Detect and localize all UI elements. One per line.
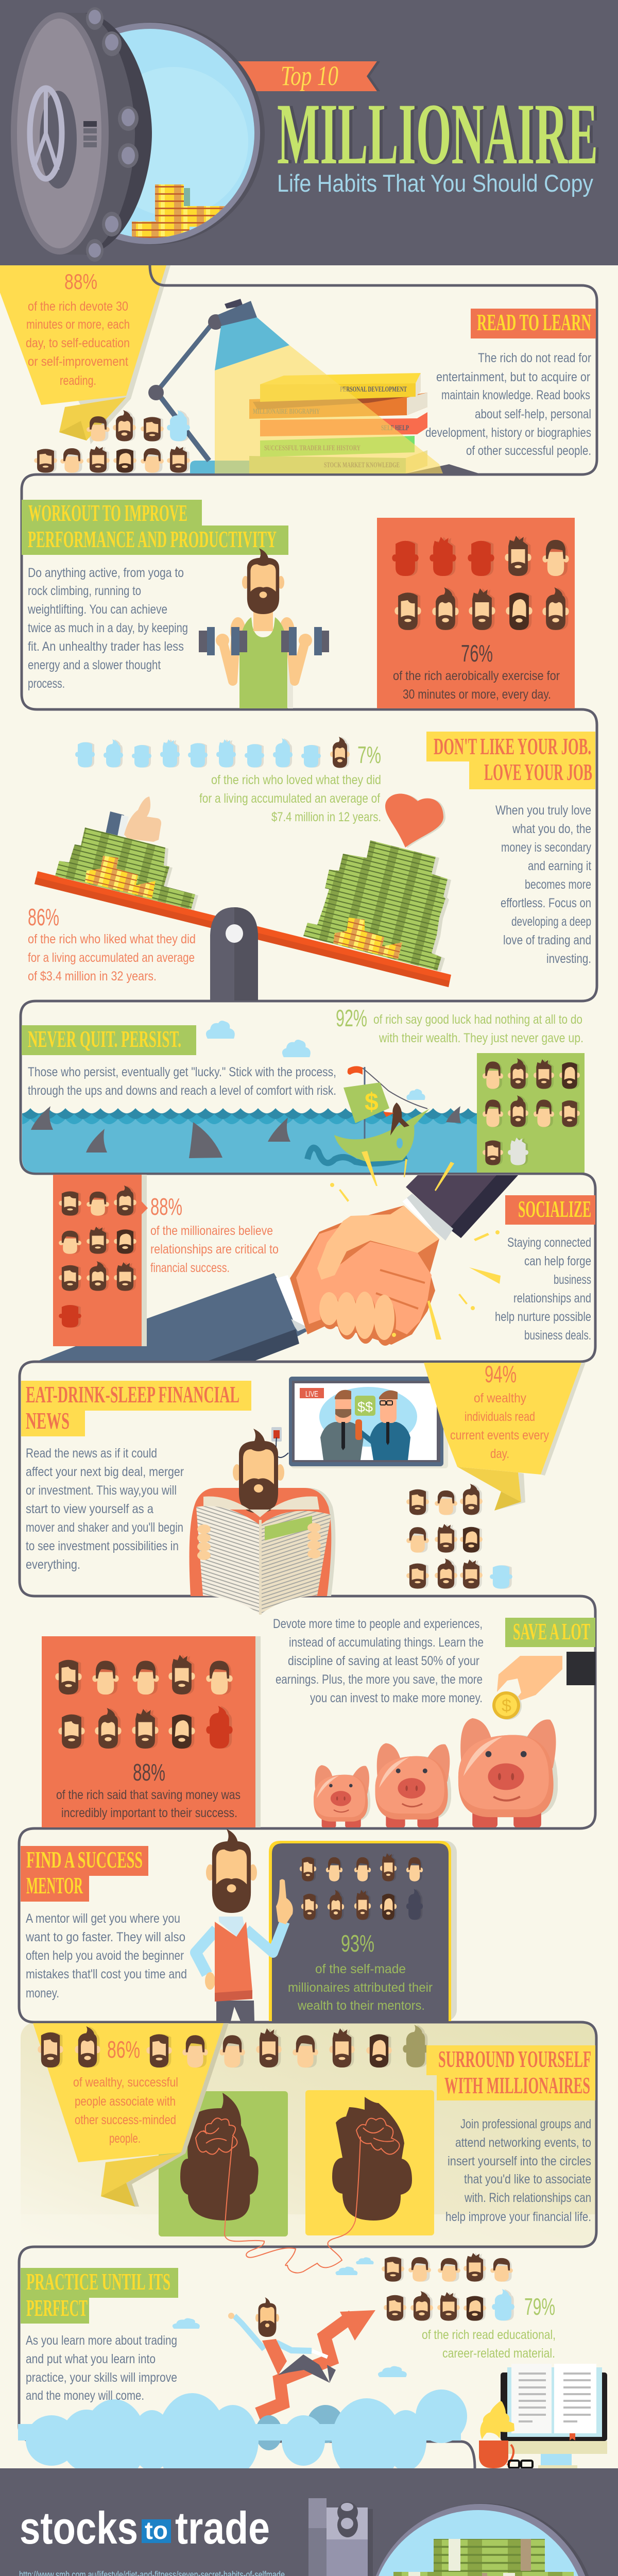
body text — [26, 2333, 177, 2403]
banner: 86% surround: people. — [109, 2131, 141, 2146]
stat: 88% relationships: financial success. — [150, 1261, 230, 1275]
stat: 88% relationships: 88% — [150, 1193, 182, 1220]
stat panel: 88% saving: 88% — [133, 1759, 165, 1786]
people icons: 79% — [382, 2253, 514, 2321]
body text: or investment. This way,you will — [26, 1483, 177, 1498]
stat panel: 88% saving — [42, 1636, 261, 1827]
body text: insert yourself into the circles — [448, 2154, 591, 2168]
body text: Do anything active, from yoga to — [28, 566, 184, 580]
books stack: SELF HELP — [381, 424, 409, 432]
section: save a lot — [42, 1617, 595, 1827]
section: surround yourself — [33, 2023, 595, 2273]
television: $$ — [357, 1399, 373, 1415]
body text: about self-help, personal — [475, 407, 591, 421]
heading: socialize — [505, 1195, 595, 1225]
body text: Those who persist, eventually get "lucky." Stick with the process, — [28, 1065, 336, 1079]
stat panel: 76%: of the rich aerobically exercise for — [393, 669, 560, 683]
heading: practice: PERFECT — [26, 2295, 88, 2321]
body text: and put what you learn into — [26, 2352, 156, 2366]
body text — [27, 566, 188, 691]
logo: stocks to trade: stocks — [20, 2502, 138, 2553]
body text: help nurture possible — [495, 1310, 591, 1324]
lamp light beam — [215, 345, 443, 473]
money pile and heart: right — [303, 794, 451, 972]
twin heads with brains — [159, 2090, 434, 2236]
body text: When you truly love — [495, 803, 591, 818]
board — [269, 1841, 457, 2021]
stat: 88% relationships: of the millionaires believe — [150, 1224, 273, 1238]
books stack — [249, 373, 427, 473]
body text: mover and shaker and you'll begin — [26, 1520, 183, 1535]
stat panel: 88% saving: of the rich said that saving money was — [56, 1788, 241, 1802]
section: socialize — [39, 1151, 595, 1361]
boat with flag and captain: $ — [365, 1089, 379, 1116]
stat: 86% liked: of $3.4 million in 32 years. — [28, 969, 157, 984]
handshake — [39, 1175, 518, 1361]
body text: instead of accumulating things. Learn the — [289, 1635, 484, 1650]
stat: 7%: for a living accumulated an average of — [199, 791, 380, 806]
stat: 86% liked — [28, 904, 196, 984]
brain strings — [225, 2137, 360, 2273]
banner: 94%: 94% — [485, 1361, 517, 1387]
money pile: left — [55, 827, 198, 910]
hand dropping coin: $ — [502, 1696, 511, 1716]
body text — [25, 1911, 187, 2001]
vault hinge — [308, 2498, 373, 2576]
body text: investing. — [546, 952, 591, 966]
heading: practice — [21, 2268, 178, 2324]
clouds — [206, 1021, 425, 1100]
section: never quit — [22, 1005, 585, 1173]
body text — [495, 803, 591, 966]
body text: becomes more — [525, 877, 591, 892]
people icons: 94% — [406, 1484, 512, 1589]
stat panel: 76% — [377, 518, 575, 708]
man reading newspaper — [190, 1429, 335, 1615]
stat: 88% — [26, 269, 130, 388]
seesaw — [35, 871, 451, 1001]
monitor with open book and coffee — [479, 2364, 607, 2468]
heading: practice: PRACTICE UNTIL ITS — [26, 2268, 170, 2295]
body text — [26, 1446, 184, 1572]
footer — [0, 2468, 618, 2576]
body text: want to go faster. They will also — [25, 1930, 185, 1944]
section background: surround yourself — [21, 2022, 596, 2247]
body text — [445, 2117, 591, 2224]
stat: 86% liked: of the rich who liked what they did — [28, 932, 196, 946]
body text: often help you avoid the beginner — [26, 1948, 184, 1963]
people icons: 88% — [34, 410, 190, 473]
stat: 88%: 88% — [64, 269, 97, 294]
piggy banks — [314, 1718, 558, 1827]
body text — [425, 351, 591, 458]
body text: attend networking events, to — [455, 2136, 591, 2150]
stat panel: 88% relationships — [53, 1175, 148, 1346]
body text — [495, 1235, 591, 1343]
body text: weightlifting. You can achieve — [27, 602, 167, 617]
section: mentor — [21, 1829, 457, 2021]
body text: through the ups and downs and reach a level of comfort with risk. — [28, 1083, 336, 1098]
body text: earnings. Plus, the more you save, the more — [276, 1672, 483, 1687]
body text: money is secondary — [501, 840, 591, 855]
body text: energy and a slower thought — [28, 658, 161, 672]
books stack: PERSONAL DEVELOPMENT — [340, 385, 407, 394]
ribbon: Top 10 — [234, 60, 380, 91]
banner: 86% surround: other success-minded — [75, 2113, 176, 2127]
board: of the self-made — [315, 1962, 406, 1976]
stat: 7% — [199, 741, 381, 824]
boat with flag and captain — [307, 1066, 430, 1163]
body text: with. Rich relationships can — [464, 2191, 591, 2205]
books stack: MILLIONAIRE BIOGRAPHY — [253, 408, 320, 416]
banner: 86% surround: of wealthy, successful — [73, 2075, 178, 2090]
stat: 7%: of the rich who loved what they did — [211, 773, 381, 787]
banner: 88% read — [0, 265, 170, 444]
logo: stocks to trade: to — [145, 2517, 168, 2545]
stat: 92%: 92% — [336, 1005, 367, 1031]
heading: workout — [22, 500, 288, 555]
body text: affect your next big deal, merger — [26, 1465, 184, 1479]
cloud bank — [18, 2389, 467, 2488]
heading: financial news — [21, 1381, 251, 1436]
banner: 86% surround: people associate with — [75, 2094, 176, 2109]
body text: help improve your financial life. — [445, 2210, 591, 2224]
sparkles — [330, 1151, 501, 1340]
body text: money. — [26, 1986, 59, 2001]
heading: save a lot — [505, 1618, 595, 1647]
body text: to see investment possibilities in — [26, 1539, 179, 1553]
logo: stocks to trade: trade — [175, 2502, 270, 2553]
board: 93% — [341, 1930, 374, 1957]
banner: 94%: day. — [490, 1447, 509, 1461]
board: millionaires attributed their — [288, 1980, 433, 1995]
stat: 7%: $7.4 million in 12 years. — [271, 810, 381, 824]
body text: twice as much in a day, by keeping — [28, 621, 188, 635]
hand dropping coin — [492, 1652, 595, 1720]
board: wealth to their mentors. — [297, 1998, 425, 2013]
serpentine frame — [19, 265, 597, 2468]
body text: what you do, the — [512, 822, 591, 836]
body text — [28, 1065, 336, 1098]
banner: 94%: individuals read — [465, 1410, 535, 1424]
body text: entertainment, but to acquire or — [436, 370, 590, 384]
stat: 79%: 79% — [524, 2293, 555, 2320]
section: practice — [18, 2253, 607, 2488]
body text: process. — [28, 676, 65, 691]
body text: The rich do not read for — [478, 351, 591, 365]
heading: mentor — [21, 1846, 148, 1902]
body text: As you learn more about trading — [26, 2333, 177, 2348]
body text: A mentor will get you where you — [26, 1911, 180, 1926]
body text: discipline of saving at least 50% of your — [288, 1654, 479, 1668]
stat: 86% surround: 86% — [107, 2036, 140, 2063]
stat: 88%: day, to self-education — [26, 336, 130, 350]
stat: 86% liked: 86% — [28, 904, 59, 930]
vault window with money — [368, 2503, 597, 2576]
banner: 86% surround — [33, 2023, 229, 2207]
heading: surround yourself — [426, 2045, 595, 2100]
section: workout — [22, 500, 575, 708]
stat: 88%: reading. — [60, 374, 96, 388]
heading: never quit: NEVER QUIT. PERSIST. — [28, 1026, 181, 1052]
body text: that you'd like to associate — [464, 2172, 591, 2187]
body text: Staying connected — [507, 1235, 591, 1250]
heading: financial news: EAT-DRINK-SLEEP FINANCIAL — [26, 1381, 239, 1408]
heading: workout: PERFORMANCE AND PRODUCTIVITY — [28, 526, 277, 552]
stat: 79%: of the rich read educational, — [422, 2328, 556, 2342]
body text: start to view yourself as a — [26, 1502, 153, 1516]
banner: 94%: current events every — [450, 1428, 549, 1443]
stat: 88%: or self-improvement — [28, 354, 128, 369]
shark fins — [31, 1106, 461, 1158]
stat: 92%: with their wealth. They just never gave up. — [379, 1031, 583, 1045]
stat: 86% liked: for a living accumulated an average — [28, 951, 195, 965]
stat: 92%: of rich say good luck had nothing at all to do — [373, 1012, 582, 1027]
body text: developing a deep — [511, 914, 591, 929]
body text: Read the news as if it could — [26, 1446, 157, 1461]
growth arrow — [258, 2310, 375, 2414]
ribbon: Top 10: Top 10 — [281, 60, 338, 91]
books stack: STOCK MARKET KNOWLEDGE — [324, 461, 400, 469]
man with dumbbells — [199, 548, 329, 708]
body text: and the money will come. — [26, 2388, 144, 2403]
sea — [22, 1108, 477, 1173]
body text: effortless. Focus on — [501, 896, 591, 910]
body text: everything. — [26, 1557, 80, 1572]
mentor figure — [196, 1829, 293, 2021]
banner: 94% — [424, 1361, 586, 1511]
heading: workout: WORKOUT TO IMPROVE — [28, 500, 187, 526]
running man — [228, 2297, 336, 2383]
stat: 88%: minutes or more, each — [26, 317, 130, 332]
section: love your job — [28, 732, 595, 1001]
body text: practice, your skills will improve — [26, 2370, 177, 2385]
television — [289, 1377, 448, 1468]
stat: 92% — [336, 1005, 583, 1045]
banner: 94%: of wealthy — [474, 1391, 526, 1405]
people icons: 7% — [75, 737, 350, 768]
stat: 88%: of the rich devote 30 — [28, 299, 128, 314]
body text: Devote more time to people and experiences, — [273, 1617, 483, 1631]
body text: you can invest to make more money. — [310, 1691, 483, 1705]
stat: 7%: 7% — [357, 741, 381, 768]
stat: 79%: career-related material. — [442, 2346, 555, 2361]
stat: 88% relationships — [150, 1193, 279, 1275]
body text: relationships and — [513, 1291, 591, 1306]
body text: fit. An unhealthy trader has less — [28, 639, 184, 654]
heading: mentor: FIND A SUCCESS — [26, 1846, 143, 1873]
vault door — [11, 7, 152, 262]
body text: business deals. — [524, 1328, 591, 1343]
small clouds — [173, 2257, 407, 2377]
logo: stocks to trade — [20, 2502, 270, 2553]
stat panel: 76%: 76% — [461, 640, 493, 667]
body text: of other successful people. — [466, 444, 591, 458]
section: financial news — [21, 1361, 586, 1615]
heading: never quit — [22, 1025, 196, 1055]
wall plug — [271, 1427, 288, 1458]
books stack: SUCCESSFUL TRADER LIFE HISTORY — [264, 444, 360, 452]
stat: 79% — [422, 2293, 556, 2361]
people icons: 86% surround — [38, 2025, 428, 2067]
lamp — [148, 299, 479, 473]
body text: mistakes that'll cost you time and — [26, 1967, 187, 1981]
body text: business — [554, 1273, 591, 1287]
stat panel: 92% people — [477, 1053, 585, 1173]
section: read to learn — [34, 299, 596, 473]
body text: love of trading and — [503, 933, 591, 947]
thumbs up — [106, 796, 161, 842]
body text — [273, 1617, 484, 1705]
heading: financial news: NEWS — [26, 1408, 70, 1434]
body text: rock climbing, running to — [28, 584, 141, 598]
hero header — [0, 0, 618, 265]
heading: mentor: MENTOR — [26, 1872, 83, 1899]
body text: and earning it — [528, 859, 591, 873]
vault opening with coins — [115, 22, 265, 245]
stat: 88% relationships: relationships are critical to — [150, 1242, 279, 1257]
television: LIVE — [305, 1390, 318, 1399]
body text: can help forge — [524, 1254, 591, 1268]
stat panel: 76%: 30 minutes or more, every day. — [403, 687, 551, 702]
stat panel: 88% saving: incredibly important to their success. — [61, 1806, 237, 1820]
heading: love your job — [426, 732, 595, 789]
